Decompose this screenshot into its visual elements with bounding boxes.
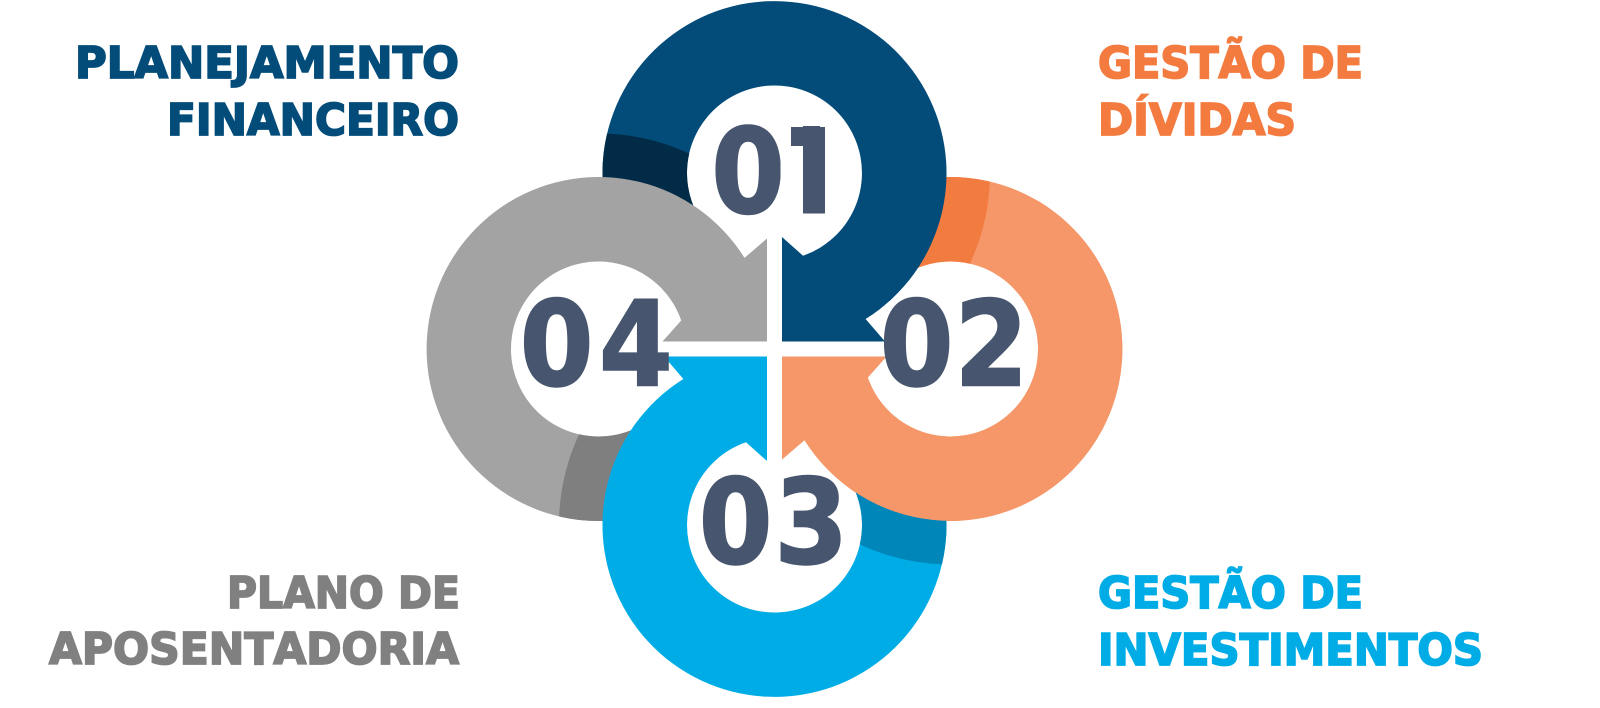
title: planejamento financeiro: FINANCEIRO bbox=[167, 95, 459, 146]
orange ring tail, beneath navy bbox=[782, 177, 1122, 521]
orange ring arrow head, above blue bbox=[782, 200, 1122, 521]
number 01 bbox=[715, 124, 825, 216]
blue ring arrow bbox=[602, 356, 947, 697]
title: gestão de investimentos: INVESTIMENTOS bbox=[1098, 625, 1483, 676]
navy ring arrow bbox=[602, 1, 947, 341]
title: gestão de investimentos bbox=[1098, 566, 1483, 676]
number 03: 03 bbox=[699, 456, 848, 591]
number 04: 04 bbox=[520, 278, 672, 413]
title: gestão de dívidas: GESTÃO DE bbox=[1098, 36, 1363, 89]
grey ring arrow bbox=[427, 177, 767, 521]
title: plano de aposentadoria: PLANO DE bbox=[227, 568, 460, 619]
title: gestão de dívidas: DÍVIDAS bbox=[1098, 93, 1296, 146]
title: planejamento financeiro bbox=[75, 38, 459, 146]
title: gestão de dívidas bbox=[1098, 36, 1363, 146]
title: plano de aposentadoria: APOSENTADORIA bbox=[49, 624, 459, 675]
title: gestão de investimentos: GESTÃO DE bbox=[1098, 566, 1363, 619]
title: plano de aposentadoria bbox=[49, 568, 460, 675]
number 01: 01 bbox=[712, 105, 844, 241]
title: planejamento financeiro: PLANEJAMENTO bbox=[75, 38, 459, 89]
number 02: 02 bbox=[880, 278, 1028, 413]
